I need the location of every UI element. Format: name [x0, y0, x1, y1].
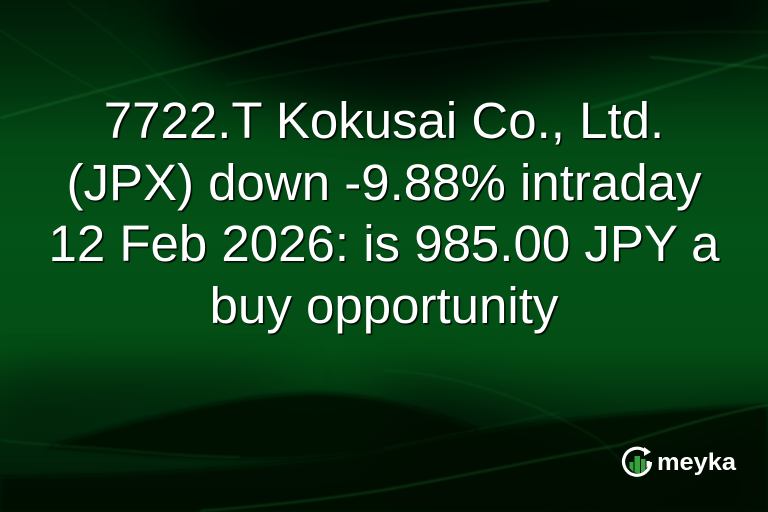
- soft dark left lower: [10, 358, 254, 412]
- logo: meyka: [622, 446, 737, 477]
- title: [48, 92, 722, 336]
- title: (JPX) down -9.88% intraday: [67, 154, 701, 210]
- title: 7722.T Kokusai Co., Ltd.: [104, 92, 664, 149]
- crisp dark lower shape: [45, 393, 480, 459]
- soft dark right lower: [382, 371, 540, 434]
- wordmark: meyka: [657, 449, 737, 476]
- soft dark upper region: [150, 0, 768, 115]
- title: 12 Feb 2026: is 985.00 JPY a: [48, 215, 720, 272]
- title: buy opportunity: [210, 276, 558, 334]
- icon: circular arrow with bars: [624, 447, 651, 475]
